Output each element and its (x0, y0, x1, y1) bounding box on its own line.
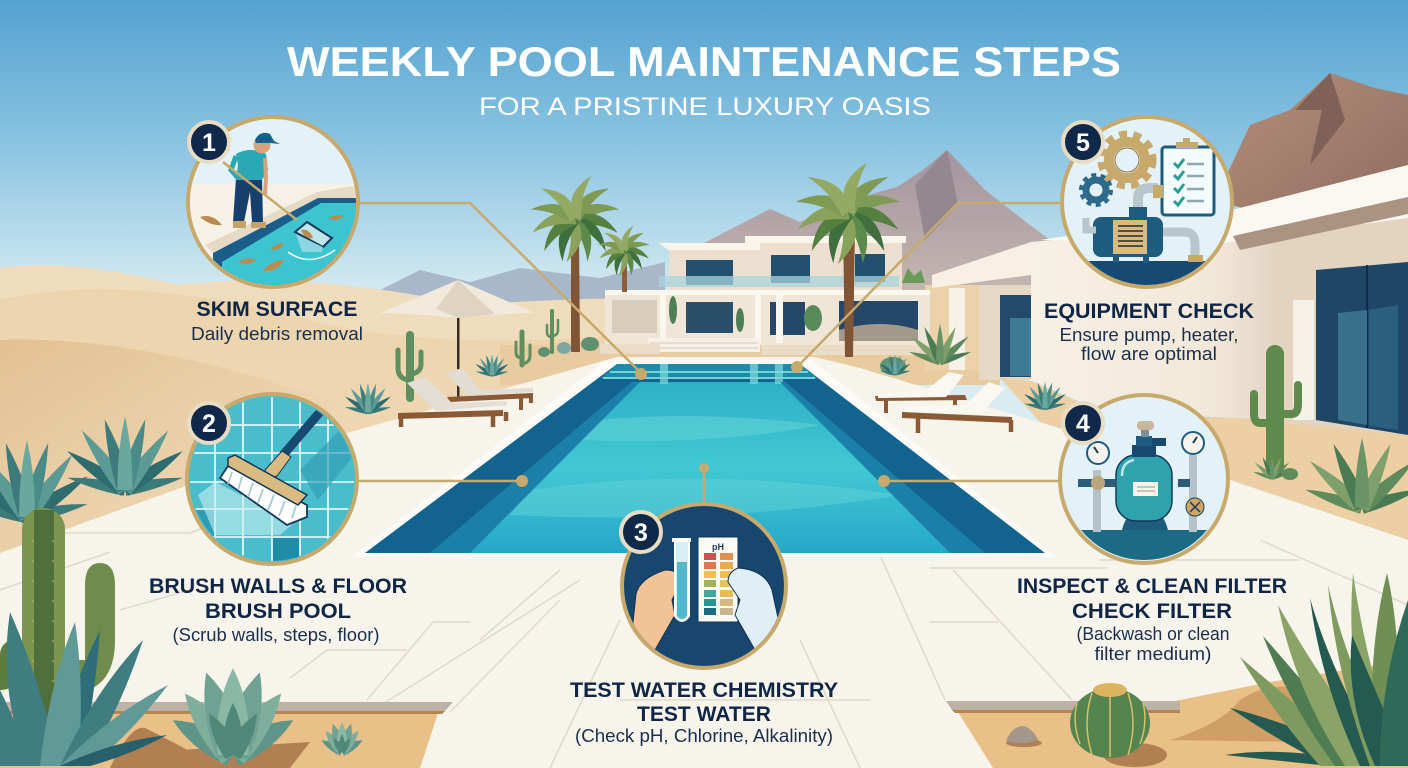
label: skim surface: SKIM SURFACE (196, 297, 358, 321)
connector: step 4 (878, 475, 1060, 487)
label: inspect and clean filter: filter medium) (1094, 644, 1212, 664)
badge 4 (1063, 403, 1103, 443)
step 3 icon: water test: pH (712, 542, 724, 552)
label: brush walls and floor (149, 574, 407, 645)
swimming pool (352, 360, 1056, 557)
label: inspect and clean filter (1017, 574, 1287, 664)
badge 2 (189, 403, 229, 443)
badge 4: 4 (1076, 410, 1090, 438)
badge 3 (621, 512, 661, 552)
label: skim surface: Daily debris removal (191, 324, 363, 344)
label: inspect and clean filter: INSPECT & CLEAN FILTER (1017, 574, 1287, 598)
foreground agave left (0, 612, 168, 766)
step 2 icon: brush (187, 394, 358, 564)
deck paving joints (0, 505, 1408, 768)
label: test water chemistry (570, 678, 838, 746)
label: skim surface (191, 297, 363, 344)
sand dunes (0, 265, 1000, 560)
title: WEEKLY POOL MAINTENANCE STEPS (287, 38, 1121, 85)
cacti behind loungers (398, 311, 558, 398)
palm tree 3 (795, 159, 901, 357)
lounge chairs right (875, 372, 1012, 433)
step 5 icon: pump and clipboard (1060, 117, 1234, 291)
label: equipment check: flow are optimal (1081, 344, 1217, 364)
label: brush walls and floor: BRUSH POOL (205, 599, 351, 623)
lounge chairs left (398, 368, 533, 427)
distant mountains (360, 73, 1408, 310)
label: test water chemistry: (Check pH, Chlorine, Alkalinity) (575, 726, 833, 746)
label: equipment check (1044, 299, 1254, 364)
connector: step 1 (359, 203, 647, 380)
villa (600, 236, 932, 355)
step 4 icon: filter tank (1060, 395, 1230, 566)
label: brush walls and floor: BRUSH WALLS & FLOOR (149, 574, 407, 598)
badge 5 (1063, 122, 1103, 162)
badge 1 (189, 122, 229, 162)
label: inspect and clean filter: (Backwash or clean (1076, 624, 1230, 644)
bottom right planter (946, 660, 1408, 768)
patio umbrella (380, 280, 535, 400)
badge 2: 2 (202, 410, 216, 438)
right building (932, 165, 1408, 440)
saguaro cactus right (1253, 345, 1298, 480)
bottom left planter (0, 702, 453, 768)
label: equipment check: EQUIPMENT CHECK (1044, 299, 1254, 323)
small succulent (319, 722, 365, 756)
palm tree 2 (598, 224, 650, 292)
connector: step 2 (357, 475, 528, 487)
desert plants (0, 324, 1408, 523)
badge 3: 3 (634, 519, 648, 547)
label: test water chemistry: TEST WATER CHEMISTRY (570, 678, 838, 702)
palm tree 1 (530, 173, 620, 352)
shrubs near villa (538, 337, 906, 375)
connector: step 5 (791, 203, 1060, 373)
pool deck (0, 357, 1408, 768)
step 1 icon: skimming (187, 117, 359, 296)
rosette succulent (166, 667, 300, 766)
subtitle: FOR A PRISTINE LUXURY OASIS (479, 93, 931, 121)
right sand strip (1000, 378, 1408, 540)
badge 5: 5 (1076, 129, 1090, 157)
barrel cactus and rock (1006, 683, 1167, 767)
saguaro cactus foreground (0, 508, 115, 740)
connector: step 3 (699, 463, 709, 503)
step 3 icon: water test (622, 504, 786, 668)
label: test water chemistry: TEST WATER (637, 702, 771, 726)
label: brush walls and floor: (Scrub walls, steps, floor) (172, 625, 380, 645)
label: inspect and clean filter: CHECK FILTER (1072, 599, 1232, 623)
label: equipment check: Ensure pump, heater, (1060, 325, 1238, 345)
foreground agave right (1225, 573, 1408, 766)
badge 1: 1 (202, 129, 216, 157)
